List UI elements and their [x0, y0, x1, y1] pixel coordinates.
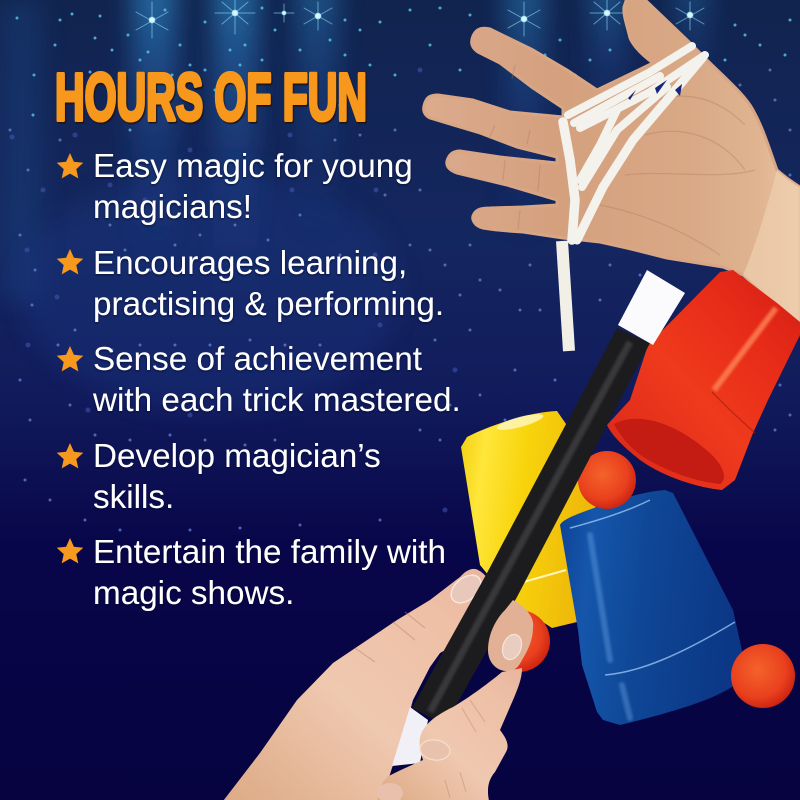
rope gaps	[628, 80, 682, 100]
lower hand: palm and thumb	[220, 569, 493, 800]
white rope on hand	[562, 46, 705, 351]
lower hand: fingers	[377, 600, 533, 800]
pom-pom ball: right	[731, 644, 795, 708]
bullet: encourages learning: practising & performing.	[93, 286, 444, 323]
bullet: entertain the family	[57, 534, 446, 612]
bullet: sense of achievement	[57, 341, 461, 419]
red cup	[607, 270, 800, 490]
magic wand	[392, 270, 685, 766]
bullet: sense of achievement: Sense of achievement	[93, 341, 422, 378]
bullet: entertain the family: Entertain the family with	[93, 534, 446, 571]
blue cup	[560, 490, 743, 725]
pom-pom ball: behind hand	[488, 610, 550, 672]
bullet: develop skills: skills.	[93, 479, 174, 516]
upper hand	[424, 0, 800, 325]
sparkle stars	[136, 0, 704, 38]
bullet: encourages learning	[57, 245, 444, 323]
bullet: entertain the family: magic shows.	[93, 575, 294, 612]
title: HOURS OF FUN	[55, 60, 367, 135]
yellow cup	[461, 411, 596, 628]
bullet: encourages learning: Encourages learning,	[93, 245, 407, 282]
bullet: sense of achievement: with each trick mastered.	[92, 382, 461, 419]
bullet: develop skills	[57, 438, 381, 516]
bullet: develop skills: Develop magician’s	[93, 438, 381, 475]
bullet: easy magic	[57, 148, 413, 226]
bullet: easy magic: magicians!	[93, 189, 252, 226]
pom-pom ball: top	[578, 451, 636, 509]
bullet: easy magic: Easy magic for young	[93, 148, 413, 185]
